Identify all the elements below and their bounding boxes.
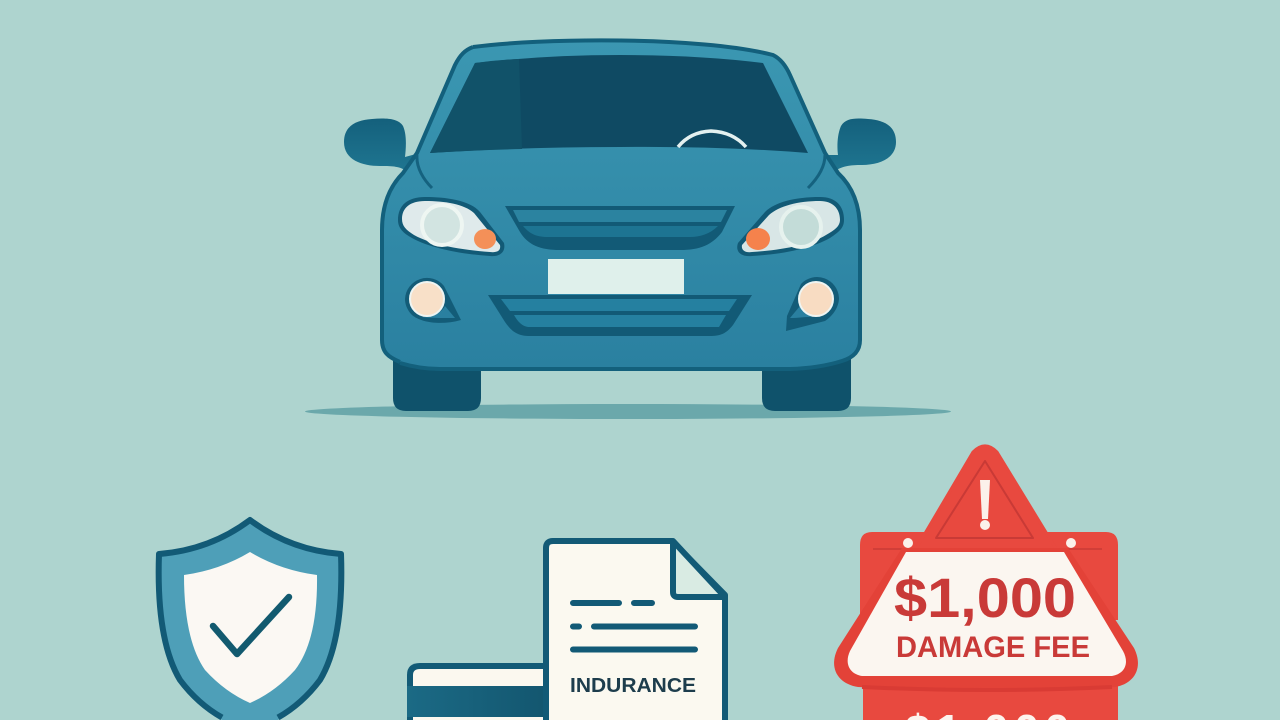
fee plate red rim <box>834 548 1138 690</box>
left wheel <box>393 355 481 411</box>
car body <box>382 40 860 370</box>
check mark <box>213 597 289 654</box>
fee plate rim shadow <box>862 687 1112 690</box>
rivets <box>903 538 913 548</box>
warning triangle <box>914 446 1058 552</box>
icon: car front view <box>344 40 896 411</box>
right headlight <box>737 197 844 256</box>
hood creases <box>417 155 825 188</box>
fee amount: $1,000 <box>894 566 1076 629</box>
licence plate <box>548 259 684 294</box>
folded corner <box>673 541 725 597</box>
red backing board <box>860 532 1118 620</box>
right wheel <box>762 355 851 411</box>
lower red panel with fee <box>863 686 1118 720</box>
left headlight <box>398 197 504 256</box>
icon: shield with check <box>159 520 341 720</box>
lower grille <box>488 295 752 336</box>
windshield <box>430 55 808 153</box>
left fog lamp <box>405 278 461 323</box>
document label: INDURANCE <box>570 675 696 697</box>
right fog lamp <box>786 277 839 331</box>
exclamation mark <box>980 480 990 519</box>
fee plate <box>848 552 1126 676</box>
right mirror <box>825 119 896 172</box>
icon: damage fee warning sign <box>834 446 1138 720</box>
text lines <box>573 603 695 650</box>
left mirror <box>344 119 416 172</box>
ground shadow <box>305 404 951 419</box>
windshield lighter panel <box>430 59 522 153</box>
body edge shading <box>382 40 860 369</box>
fee label: DAMAGE FEE <box>896 631 1090 664</box>
icon: insurance document <box>546 541 725 720</box>
icon: payment card <box>407 663 548 720</box>
wiper arc <box>678 131 746 147</box>
board hanging line <box>873 548 1102 550</box>
upper grille <box>505 206 735 250</box>
